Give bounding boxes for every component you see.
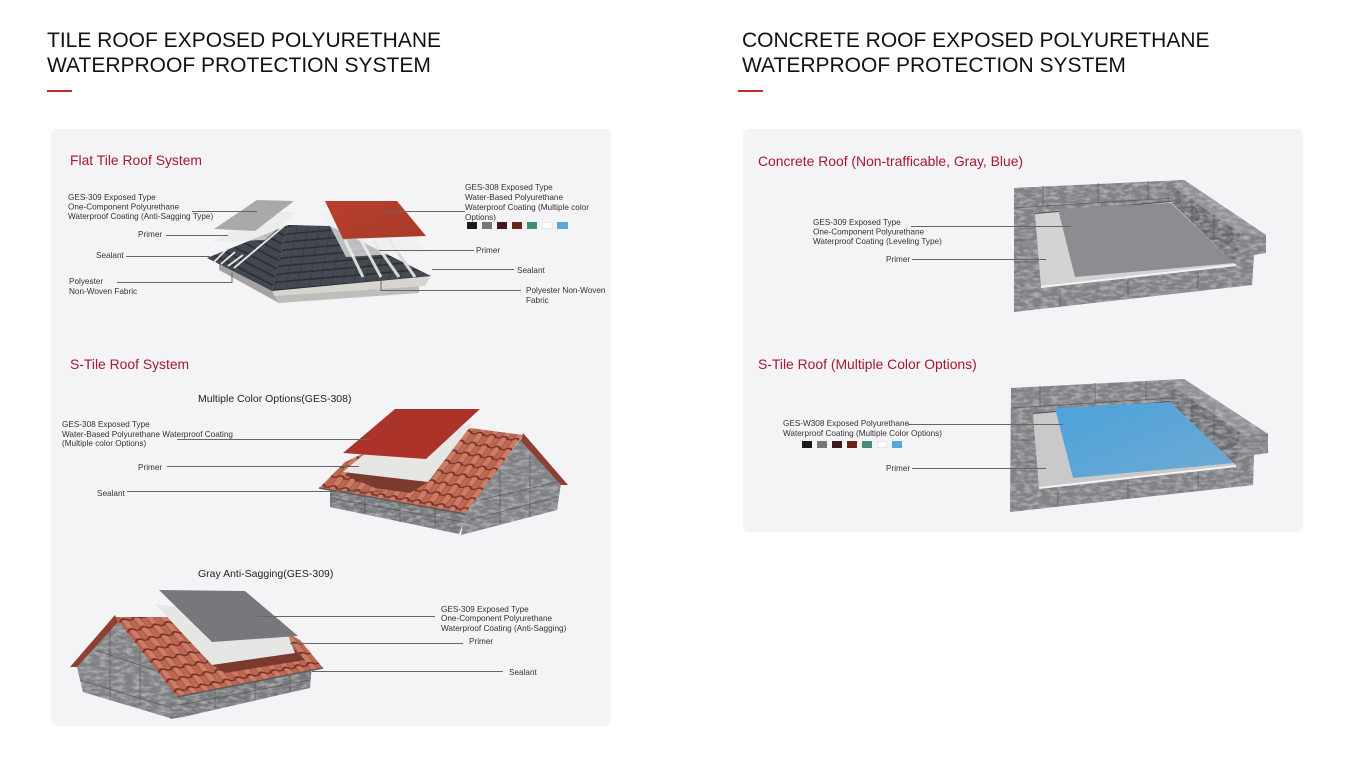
callout: polyester fabric flat roof right: Fabric xyxy=(526,296,549,305)
callout: primer concrete blue: Primer xyxy=(886,464,910,473)
callout: GES-309 s-tile: One-Component Polyurethane xyxy=(441,614,553,623)
callout: primer concrete gray: Primer xyxy=(886,255,910,264)
callout: GES-W308 concrete xyxy=(783,419,1063,438)
diagram: concrete roof gray coating xyxy=(1014,180,1266,312)
diagram: flat tile roof layers xyxy=(207,200,431,303)
colour swatches: concrete roof xyxy=(802,441,902,448)
callout: GES-308 s-tile: (Multiple color Options) xyxy=(62,439,146,448)
callout: GES-308 s-tile: Water-Based Polyurethane Waterproof Coating xyxy=(62,430,233,439)
callout: GES-308 flat roof: GES-308 Exposed Type xyxy=(465,183,553,192)
callout: GES-309 concrete: GES-309 Exposed Type xyxy=(813,218,901,227)
title: tile roof system: TILE ROOF EXPOSED POLYURETHANE xyxy=(47,29,441,52)
callout: primer flat roof left xyxy=(138,230,228,239)
callout: GES-308 flat roof: Water-Based Polyurethane xyxy=(465,193,563,202)
callout: GES-308 s-tile: GES-308 Exposed Type xyxy=(62,420,150,429)
panel: tile roof systems xyxy=(51,129,611,726)
callout: GES-309 concrete: One-Component Polyurethane xyxy=(813,228,925,236)
diagram: concrete roof blue coating xyxy=(1010,379,1268,512)
callout: primer flat roof left: Primer xyxy=(138,230,162,239)
title: tile roof system: WATERPROOF PROTECTION SYSTEM xyxy=(47,54,431,77)
heading: flat tile roof system: Flat Tile Roof System xyxy=(70,152,202,168)
callout: primer s-tile gray: Primer xyxy=(469,637,493,646)
title accent: tile roof xyxy=(47,90,72,92)
diagram: s-tile roof with red coating xyxy=(319,409,568,535)
callout: sealant flat roof left: Sealant xyxy=(96,251,124,260)
callout: polyester fabric flat roof left: Non-Woven Fabric xyxy=(69,287,137,296)
callout: GES-308 s-tile xyxy=(62,420,370,448)
callout: sealant flat roof left xyxy=(96,251,210,260)
title: concrete roof system: WATERPROOF PROTECTION SYSTEM xyxy=(742,54,1126,77)
callout: polyester fabric flat roof left: Polyester xyxy=(69,277,103,286)
heading: s-tile roof system: S-Tile Roof System xyxy=(70,356,189,372)
callout: primer s-tile red: Primer xyxy=(138,463,162,472)
callout: primer flat roof right: Primer xyxy=(476,246,500,255)
callout: GES-W308 concrete: Waterproof Coating (Multiple Color Options) xyxy=(783,429,942,438)
panel: concrete roof systems xyxy=(743,129,1303,532)
callout: GES-308 flat roof: Waterproof Coating (Multiple color xyxy=(465,203,589,212)
callout: polyester fabric flat roof left xyxy=(69,272,232,296)
subheading: multiple color options: Multiple Color Options(GES-308) xyxy=(198,393,351,405)
callout: GES-309 s-tile xyxy=(257,605,567,633)
heading: concrete roof: Concrete Roof (Non-trafficable, Gray, Blue) xyxy=(758,153,1023,169)
callout: GES-W308 concrete: GES-W308 Exposed Polyurethane xyxy=(783,419,910,428)
callout: sealant s-tile gray: Sealant xyxy=(509,668,537,677)
callout: polyester fabric flat roof right xyxy=(381,280,606,305)
title: concrete roof system: CONCRETE ROOF EXPOSED POLYURETHANE xyxy=(742,29,1210,52)
title: tile roof system xyxy=(47,29,441,77)
callout: GES-309 concrete: Waterproof Coating (Leveling Type) xyxy=(813,237,942,246)
callout: GES-309 concrete xyxy=(813,218,1071,246)
callout: GES-309 flat roof: GES-309 Exposed Type xyxy=(68,193,156,202)
title: concrete roof system xyxy=(742,29,1210,77)
heading: s-tile roof colours: S-Tile Roof (Multiple Color Options) xyxy=(758,356,977,372)
callout: GES-309 flat roof xyxy=(68,193,257,221)
title accent: concrete roof xyxy=(738,90,763,92)
callout: GES-309 flat roof: Waterproof Coating (Anti-Sagging Type) xyxy=(68,212,213,221)
callout: GES-308 flat roof: Options) xyxy=(465,213,496,222)
callout: GES-309 s-tile: Waterproof Coating (Anti-Sagging) xyxy=(441,624,567,633)
colour swatches: flat roof xyxy=(467,222,568,229)
subheading: gray anti-sagging: Gray Anti-Sagging(GES-309) xyxy=(198,568,333,580)
callout: sealant s-tile red: Sealant xyxy=(97,489,125,498)
diagram: s-tile roof with gray coating xyxy=(70,590,323,719)
callout: primer flat roof right xyxy=(379,246,500,255)
callout: sealant flat roof right: Sealant xyxy=(517,266,545,275)
callout: polyester fabric flat roof right: Polyester Non-Woven xyxy=(526,286,606,295)
callout: GES-308 flat roof xyxy=(381,183,589,222)
callout: sealant flat roof right xyxy=(432,266,545,275)
callout: GES-309 s-tile: GES-309 Exposed Type xyxy=(441,605,529,614)
callout: GES-309 flat roof: One-Component Polyurethane xyxy=(68,202,180,212)
